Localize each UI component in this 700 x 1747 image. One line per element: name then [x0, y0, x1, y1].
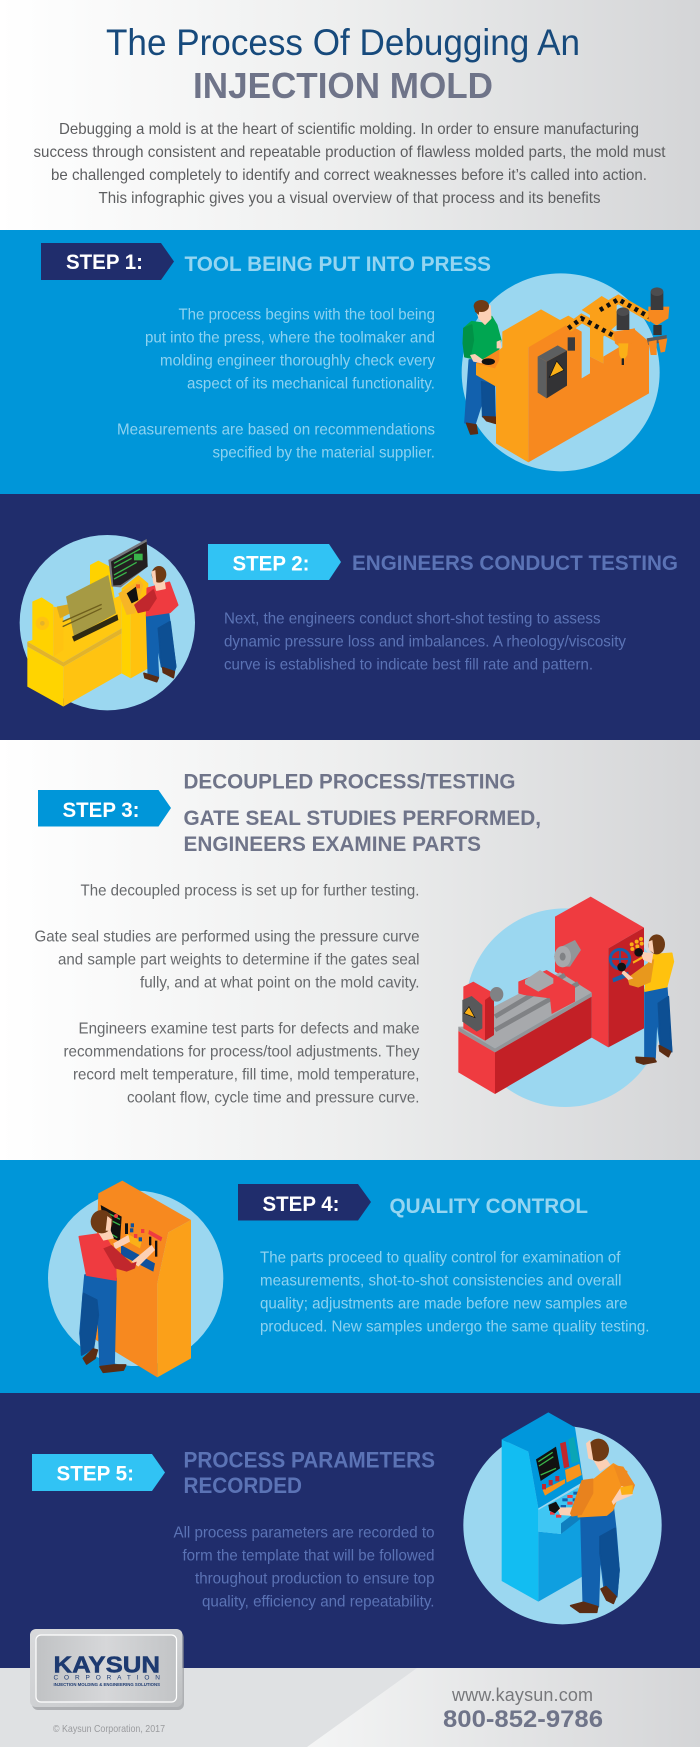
- intro text: This infographic gives you a visual overview of that process and its benefits: [98, 190, 600, 207]
- step 2 heading: ENGINEERS CONDUCT TESTING: [352, 552, 678, 575]
- step 3 badge: STEP 3:: [62, 799, 140, 822]
- step 5 text: form the template that will be followed: [182, 1548, 434, 1564]
- phone number: 800-852-9786: [443, 1706, 603, 1733]
- step 3 text: and sample part weights to determine if the gates seal: [58, 952, 420, 968]
- step 4 heading: QUALITY CONTROL: [390, 1195, 588, 1218]
- step 4 text: measurements, shot-to-shot consistencies and overall: [260, 1272, 622, 1290]
- panel: step 4: [0, 1160, 700, 1393]
- step 2 text: [224, 610, 626, 674]
- step 3 text: recommendations for process/tool adjustments. They: [64, 1044, 420, 1060]
- title: The Process Of Debugging An: [106, 21, 580, 63]
- step 5 text: All process parameters are recorded to: [174, 1524, 435, 1542]
- step 2 badge: STEP 2:: [232, 552, 310, 576]
- step 5 text: throughout production to ensure top: [195, 1570, 435, 1588]
- step 5 text: quality, efficiency and repeatability.: [202, 1594, 434, 1610]
- step 1 text: put into the press, where the toolmaker and: [145, 330, 435, 346]
- intro text: [34, 121, 666, 207]
- illustration: orange machine and engineer in green: [462, 273, 669, 471]
- step 1 text: aspect of its mechanical functionality.: [187, 376, 435, 392]
- step 1 text: molding engineer thoroughly check every: [160, 352, 435, 370]
- step 2 text: curve is established to indicate best fill rate and pattern.: [224, 656, 593, 674]
- step 2 text: Next, the engineers conduct short-shot testing to assess: [224, 610, 600, 628]
- step 3 headings: ENGINEERS EXAMINE PARTS: [184, 833, 481, 856]
- logo plate: CORPORATION: [54, 1674, 160, 1682]
- step 1 badge: [41, 243, 174, 280]
- logo plate: INJECTION MOLDING & ENGINEERING SOLUTIONS: [54, 1682, 160, 1687]
- step 1 heading: TOOL BEING PUT INTO PRESS: [184, 253, 491, 276]
- step 4 text: The parts proceed to quality control for examination of: [260, 1250, 621, 1266]
- step 4 badge: STEP 4:: [262, 1193, 340, 1216]
- step 1 text: The process begins with the tool being: [178, 306, 435, 324]
- step 5 text: [174, 1524, 435, 1610]
- step 3 text: record melt temperature, fill time, mold temperature,: [73, 1066, 420, 1084]
- copyright: © Kaysun Corporation, 2017: [53, 1723, 165, 1735]
- step 4 text: quality; adjustments are made before new samples are: [260, 1296, 628, 1312]
- illustration: blue control cabinet and engineer in orange: [463, 1412, 662, 1624]
- illustration: orange control cabinet and engineer in red: [48, 1181, 223, 1377]
- title: INJECTION MOLD: [193, 65, 493, 106]
- step 5 heading: RECORDED: [184, 1473, 302, 1498]
- step 1 text: specified by the material supplier.: [212, 444, 435, 462]
- step 3 text: coolant flow, cycle time and pressure curve.: [127, 1090, 420, 1106]
- step 3 headings: DECOUPLED PROCESS/TESTING: [184, 770, 516, 794]
- step 3 text: fully, and at what point on the mold cavity.: [140, 974, 420, 992]
- panel: step 3: [0, 740, 700, 1160]
- step 3 text: Engineers examine test parts for defects and make: [78, 1020, 420, 1038]
- illustration: red machine and engineer in yellow: [458, 897, 673, 1107]
- step 5 badge: [32, 1454, 165, 1491]
- step 4 text: [260, 1250, 650, 1336]
- logo plate: [30, 1629, 184, 1710]
- step 3 text: Gate seal studies are performed using the pressure curve: [34, 928, 420, 946]
- panel: step 5: [0, 1393, 700, 1668]
- panel: step 2: [0, 494, 700, 740]
- intro text: Debugging a mold is at the heart of scientific molding. In order to ensure manufacturing: [59, 121, 639, 138]
- step 4 badge: [238, 1184, 371, 1220]
- step 1 text: [117, 306, 435, 462]
- panel: header: [0, 0, 700, 230]
- step 4 text: produced. New samples undergo the same quality testing.: [260, 1318, 650, 1336]
- step 3 headings: [184, 770, 541, 856]
- title: [106, 21, 580, 106]
- step 3 badge: [38, 790, 171, 826]
- panel: step 1: [0, 230, 700, 494]
- step 2 text: dynamic pressure loss and imbalances. A rheology/viscosity: [224, 634, 626, 650]
- step 1 text: Measurements are based on recommendations: [117, 422, 435, 438]
- step 5 heading: [184, 1448, 435, 1498]
- step 5 badge: STEP 5:: [56, 1462, 134, 1486]
- logo plate: KAYSUN: [54, 1652, 160, 1678]
- intro text: be challenged completely to identify and correct weaknesses before it’s called into action.: [51, 167, 647, 184]
- panel: footer: [0, 1629, 700, 1747]
- intro text: success through consistent and repeatable production of flawless molded parts, the mold must: [34, 144, 666, 161]
- step 1 badge: STEP 1:: [66, 251, 143, 274]
- step 3 text: [34, 882, 420, 1106]
- step 5 heading: PROCESS PARAMETERS: [184, 1448, 435, 1472]
- step 3 text: The decoupled process is set up for further testing.: [80, 882, 420, 900]
- illustration: yellow machine and engineer in red: [20, 535, 195, 710]
- step 2 badge: [208, 544, 341, 580]
- step 3 headings: GATE SEAL STUDIES PERFORMED,: [184, 807, 541, 830]
- website: www.kaysun.com: [451, 1685, 593, 1705]
